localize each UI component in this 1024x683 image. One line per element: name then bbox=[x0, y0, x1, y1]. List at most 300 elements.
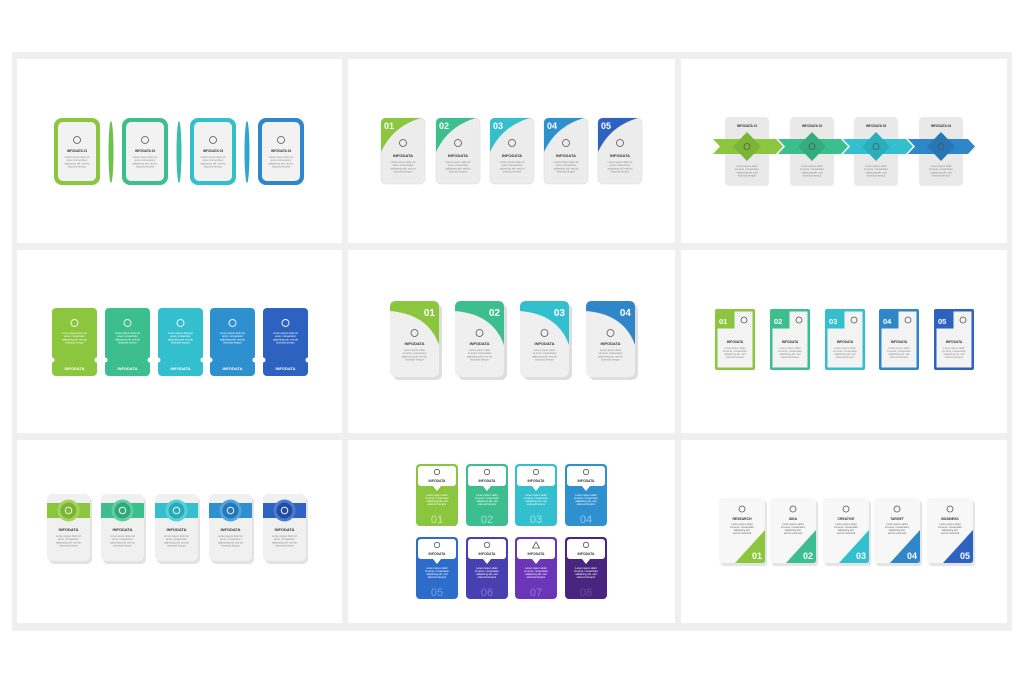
card 2-3: 03 bbox=[493, 121, 503, 131]
card 4-2: Lorem ipsum dolor sit bbox=[115, 332, 140, 335]
gray cards with labels: INFODATA 02 bbox=[802, 124, 822, 128]
card 7-2 bbox=[101, 494, 146, 564]
card 1-1: eiusmod tempor bbox=[68, 165, 86, 169]
card 1-2: adipiscing elit, sed do bbox=[133, 161, 158, 165]
card 7-5: adipiscing elit, sed do bbox=[272, 540, 297, 544]
arrow band bbox=[713, 132, 975, 161]
card 2-2: 02 bbox=[439, 121, 449, 131]
card 4-1: Lorem ipsum dolor sit bbox=[62, 332, 87, 335]
card 6-5: eiusmod tempor bbox=[945, 355, 963, 359]
card 6-1: INFODATA bbox=[727, 340, 744, 344]
card 4-3: Lorem ipsum dolor sit bbox=[168, 332, 193, 335]
card 7-3: amet, consectetur bbox=[166, 537, 187, 541]
card 5-3: eiusmod tempor bbox=[535, 358, 554, 362]
card 6-5: INFODATA bbox=[946, 340, 963, 344]
card 9-5 business: Lorem ipsum dolor bbox=[939, 523, 961, 526]
card 6-2: adipiscing elit, sed bbox=[779, 352, 801, 356]
card 1-4: adipiscing elit, sed do bbox=[269, 161, 294, 165]
panel 8: 8-card grid bbox=[348, 440, 675, 623]
card 2-5: eiusmod tempor bbox=[611, 170, 629, 174]
card 9-2 idea: adipiscing elit, bbox=[785, 528, 801, 532]
card 7-1: amet, consectetur bbox=[58, 537, 79, 541]
gray cards with labels: sit amet, consectetur bbox=[929, 167, 953, 171]
card 1-1 bbox=[54, 118, 100, 185]
card 2-4: amet, consectetur bbox=[556, 163, 576, 167]
card 4-3 bbox=[156, 308, 206, 376]
card 5-4: adipiscing elit, sed do bbox=[598, 354, 623, 358]
card 4-1: amet, consectetur bbox=[64, 334, 85, 338]
card 1-3 bbox=[190, 118, 236, 185]
card 2-4: adipiscing elit, sed do bbox=[554, 166, 579, 170]
card 1-3: Lorem ipsum dolor sit bbox=[201, 156, 225, 159]
card 4-4: eiusmod tempor bbox=[223, 341, 242, 345]
gray cards with labels bbox=[725, 117, 963, 186]
card 6-1: 01 bbox=[719, 317, 727, 326]
card 2-4: eiusmod tempor bbox=[557, 170, 575, 174]
card 8-6: INFODATA bbox=[478, 552, 496, 556]
card 9-3 creative: CREATIVE bbox=[838, 517, 855, 521]
card 2-3: eiusmod tempor bbox=[503, 170, 521, 174]
card 8-6: sit amet, consectetur bbox=[475, 569, 499, 573]
gray cards with labels: Lorem ipsum dolor bbox=[930, 165, 952, 168]
card 4-2: INFODATA bbox=[117, 366, 138, 371]
card 6-4: Lorem ipsum dolor bbox=[888, 347, 910, 350]
card 2-5: Lorem ipsum dolor sit bbox=[608, 161, 632, 164]
card 4-1: eiusmod tempor bbox=[65, 341, 84, 345]
card 8-7: INFODATA bbox=[527, 552, 545, 556]
card 2-1: amet, consectetur bbox=[393, 163, 413, 167]
card 2-1: Lorem ipsum dolor sit bbox=[391, 161, 415, 164]
card 2-3 bbox=[490, 118, 534, 184]
card 1-1: amet, consectetur bbox=[67, 158, 87, 162]
card 9-4 target: sed do eiusmod bbox=[888, 531, 907, 535]
card 2-1: 01 bbox=[384, 121, 394, 131]
card 8-3 bbox=[515, 464, 557, 526]
panel 6: bordered number cards bbox=[681, 250, 1007, 433]
card 8-6 bbox=[466, 537, 508, 599]
card 2-5: adipiscing elit, sed do bbox=[608, 166, 633, 170]
card 8-7 bbox=[515, 537, 557, 599]
card 8-5: 05 bbox=[431, 587, 443, 599]
card 8-2: adipiscing elit, sed bbox=[476, 499, 498, 503]
card 8-6: adipiscing elit, sed bbox=[476, 572, 498, 576]
card 8-4: sit amet, consectetur bbox=[574, 496, 598, 500]
card 5-1: Lorem ipsum dolor bbox=[404, 349, 425, 352]
card 8-3: sit amet, consectetur bbox=[524, 496, 548, 500]
card 8-5: sit amet, consectetur bbox=[425, 569, 449, 573]
card 9-4 target: Lorem ipsum dolor bbox=[886, 523, 908, 526]
card 8-3: INFODATA bbox=[527, 479, 545, 483]
card 5-4: eiusmod tempor bbox=[601, 358, 620, 362]
card 2-2: INFODATA bbox=[448, 153, 468, 158]
card 9-2 idea: IDEA bbox=[789, 517, 798, 521]
card 2-4: INFODATA bbox=[556, 153, 576, 158]
card 2-4: Lorem ipsum dolor sit bbox=[554, 161, 578, 164]
card 7-2: Lorem ipsum dolor sit bbox=[110, 535, 135, 538]
card 6-5: sit amet, consectetur bbox=[942, 349, 966, 353]
card 8-8: Lorem ipsum dolor bbox=[575, 567, 597, 570]
card 5-4: Lorem ipsum dolor bbox=[600, 349, 621, 352]
card 8-3: eiusmod tempor bbox=[527, 502, 545, 506]
card 7-3: adipiscing elit, sed do bbox=[164, 540, 189, 544]
card 8-1: INFODATA bbox=[428, 479, 446, 483]
panel 2: curved number cards bbox=[348, 59, 675, 243]
card 2-2: amet, consectetur bbox=[448, 163, 468, 167]
card 8-8 bbox=[565, 537, 607, 599]
card 9-1 research: sed do eiusmod bbox=[733, 531, 752, 535]
card 2-1: adipiscing elit, sed do bbox=[391, 166, 416, 170]
panel 3: arrow timeline bbox=[681, 59, 1007, 243]
card 6-3: eiusmod tempor bbox=[836, 355, 854, 359]
card 8-2 bbox=[466, 464, 508, 526]
card 8-7: Lorem ipsum dolor bbox=[525, 567, 547, 570]
card 9-2 idea: sed do eiusmod bbox=[784, 531, 803, 535]
card 5-4: INFODATA bbox=[600, 341, 621, 346]
gray cards with labels: eiusmod tempor bbox=[803, 174, 821, 178]
card 8-5: eiusmod tempor bbox=[428, 575, 446, 579]
card 7-4: INFODATA bbox=[220, 527, 241, 532]
card 2-3: Lorem ipsum dolor sit bbox=[500, 161, 524, 164]
card 9-1 research: sit amet, consectetur bbox=[730, 525, 754, 529]
card 9-5 business: sit amet, consectetur bbox=[938, 525, 962, 529]
card 9-5 business bbox=[927, 498, 975, 566]
card 8-8: adipiscing elit, sed bbox=[575, 572, 597, 576]
card 2-5: amet, consectetur bbox=[610, 163, 630, 167]
card 4-5: eiusmod tempor bbox=[276, 341, 295, 345]
card 7-1 bbox=[47, 494, 92, 564]
card 5-2: eiusmod tempor bbox=[470, 358, 489, 362]
card 9-4 target: sit amet, consectetur bbox=[885, 525, 909, 529]
card 6-2: INFODATA bbox=[782, 340, 799, 344]
card 8-4: eiusmod tempor bbox=[577, 502, 595, 506]
card 9-3 creative: Lorem ipsum dolor bbox=[835, 523, 857, 526]
card 8-2: Lorem ipsum dolor bbox=[476, 494, 498, 497]
card 6-5: adipiscing elit, sed bbox=[943, 352, 965, 356]
card 9-4 target bbox=[874, 498, 922, 566]
gray cards with labels: INFODATA 04 bbox=[931, 124, 951, 128]
card 8-2: eiusmod tempor bbox=[478, 502, 496, 506]
card 1-3: INFODATA 03 bbox=[203, 149, 223, 153]
card 7-2: amet, consectetur bbox=[112, 537, 133, 541]
card 6-3: adipiscing elit, sed bbox=[834, 352, 856, 356]
card 7-5: eiusmod tempor bbox=[275, 544, 294, 548]
card 6-3: Lorem ipsum dolor bbox=[834, 347, 856, 350]
card 8-1: Lorem ipsum dolor bbox=[426, 494, 448, 497]
card 4-5: Lorem ipsum dolor sit bbox=[273, 332, 298, 335]
card 8-3: 03 bbox=[530, 514, 542, 526]
card 7-1: Lorem ipsum dolor sit bbox=[56, 535, 81, 538]
card 9-4 target: 04 bbox=[907, 551, 917, 561]
card 8-6: 06 bbox=[481, 587, 493, 599]
card 6-4 bbox=[879, 309, 919, 370]
gray cards with labels: INFODATA 01 bbox=[737, 124, 757, 128]
card 5-1: adipiscing elit, sed do bbox=[402, 354, 427, 358]
card 5-3: 03 bbox=[554, 308, 565, 319]
card 6-1: Lorem ipsum dolor bbox=[724, 347, 746, 350]
card 5-4: 04 bbox=[620, 308, 631, 319]
panel 7: banded circle cards bbox=[17, 440, 342, 623]
card 8-5: adipiscing elit, sed bbox=[426, 572, 448, 576]
card 9-3 creative bbox=[823, 498, 871, 566]
card 2-2: adipiscing elit, sed do bbox=[446, 166, 471, 170]
card 8-4: 04 bbox=[580, 514, 592, 526]
gray cards with labels: eiusmod tempor bbox=[738, 174, 756, 178]
card 7-4: Lorem ipsum dolor sit bbox=[218, 535, 243, 538]
card 4-4: amet, consectetur bbox=[222, 334, 243, 338]
card 9-1 research bbox=[719, 498, 767, 566]
card 2-2 bbox=[436, 118, 480, 184]
card 8-4: Lorem ipsum dolor bbox=[575, 494, 597, 497]
card 2-5: 05 bbox=[601, 121, 611, 131]
card 8-7: 07 bbox=[530, 587, 542, 599]
card 6-1: adipiscing elit, sed bbox=[724, 352, 746, 356]
gray cards with labels: INFODATA 03 bbox=[866, 124, 886, 128]
card 2-1: eiusmod tempor bbox=[394, 170, 412, 174]
card 5-3: Lorem ipsum dolor bbox=[534, 349, 555, 352]
card 4-1: INFODATA bbox=[64, 366, 85, 371]
card 9-1 research: adipiscing elit, bbox=[734, 528, 750, 532]
card 6-3 bbox=[825, 309, 865, 370]
gray cards with labels: eiusmod tempor bbox=[867, 174, 885, 178]
card 6-4: adipiscing elit, sed bbox=[888, 352, 910, 356]
card 1-2: eiusmod tempor bbox=[136, 165, 154, 169]
card 5-1: INFODATA bbox=[404, 341, 425, 346]
card 8-5: Lorem ipsum dolor bbox=[426, 567, 448, 570]
card 6-4: 04 bbox=[883, 317, 892, 326]
card 7-2: adipiscing elit, sed do bbox=[110, 540, 135, 544]
card 8-4: INFODATA bbox=[577, 479, 595, 483]
card 4-5: INFODATA bbox=[275, 366, 296, 371]
card 5-4 bbox=[586, 301, 638, 380]
card 6-2: 02 bbox=[774, 317, 782, 326]
card 7-5 bbox=[263, 494, 308, 564]
card 8-4: adipiscing elit, sed bbox=[575, 499, 597, 503]
card 6-3: 03 bbox=[829, 317, 837, 326]
lens separators bbox=[108, 121, 250, 183]
card 5-3: adipiscing elit, sed do bbox=[532, 354, 557, 358]
card 4-3: amet, consectetur bbox=[170, 334, 191, 338]
card 8-1: adipiscing elit, sed bbox=[426, 499, 448, 503]
card 8-7: sit amet, consectetur bbox=[524, 569, 548, 573]
card 8-6: eiusmod tempor bbox=[478, 575, 496, 579]
card 9-1 research: RESEARCH bbox=[732, 517, 752, 521]
card 7-3: Lorem ipsum dolor sit bbox=[164, 535, 189, 538]
card 5-2 bbox=[455, 301, 507, 380]
card 9-1 research: Lorem ipsum dolor bbox=[731, 523, 753, 526]
card 8-3: Lorem ipsum dolor bbox=[525, 494, 547, 497]
card 7-5: amet, consectetur bbox=[274, 537, 295, 541]
card 7-3: eiusmod tempor bbox=[167, 544, 186, 548]
card 8-7: eiusmod tempor bbox=[527, 575, 545, 579]
card 8-1 bbox=[416, 464, 458, 526]
card 7-4: adipiscing elit, sed do bbox=[218, 540, 243, 544]
card 5-3: sit amet, consectetur bbox=[533, 351, 557, 355]
card 4-3: INFODATA bbox=[170, 366, 191, 371]
card 9-3 creative: sed do eiusmod bbox=[837, 531, 856, 535]
card 8-2: 02 bbox=[481, 514, 493, 526]
card 7-1: adipiscing elit, sed do bbox=[56, 540, 81, 544]
card 8-2: INFODATA bbox=[478, 479, 496, 483]
card 5-3: INFODATA bbox=[534, 341, 555, 346]
card 9-2 idea: Lorem ipsum dolor bbox=[782, 523, 804, 526]
card 9-5 business: BUSINESS bbox=[941, 517, 959, 521]
card 7-2: eiusmod tempor bbox=[113, 544, 132, 548]
card 6-3: INFODATA bbox=[837, 340, 854, 344]
card 9-3 creative: 03 bbox=[856, 551, 866, 561]
card 8-5: INFODATA bbox=[428, 552, 446, 556]
card 4-5: amet, consectetur bbox=[275, 334, 296, 338]
gray cards with labels: Lorem ipsum dolor bbox=[865, 165, 887, 168]
gray cards with labels: adipiscing elit, sed bbox=[865, 170, 887, 174]
card 7-1: INFODATA bbox=[58, 527, 79, 532]
card 5-2: INFODATA bbox=[469, 341, 490, 346]
card 8-3: adipiscing elit, sed bbox=[525, 499, 547, 503]
card 9-1 research: 01 bbox=[752, 551, 762, 561]
card 1-4 bbox=[258, 118, 304, 185]
card 8-1: eiusmod tempor bbox=[428, 502, 446, 506]
gray cards with labels: Lorem ipsum dolor bbox=[801, 165, 823, 168]
card 2-5 bbox=[598, 118, 642, 184]
panel 4: ticket cards bbox=[17, 250, 342, 433]
card 6-4: eiusmod tempor bbox=[890, 355, 908, 359]
card 4-3: adipiscing elit, sed do bbox=[168, 337, 193, 341]
card 8-7: adipiscing elit, sed bbox=[525, 572, 547, 576]
card 8-8: sit amet, consectetur bbox=[574, 569, 598, 573]
card 7-2: INFODATA bbox=[112, 527, 133, 532]
gray cards with labels: adipiscing elit, sed bbox=[801, 170, 823, 174]
card 4-2: eiusmod tempor bbox=[118, 341, 137, 345]
card 5-2: sit amet, consectetur bbox=[468, 351, 492, 355]
card 5-3 bbox=[520, 301, 572, 380]
card 6-5 bbox=[934, 309, 974, 370]
card 1-3: eiusmod tempor bbox=[204, 165, 222, 169]
card 4-4 bbox=[208, 308, 258, 376]
gray cards with labels: adipiscing elit, sed bbox=[930, 170, 952, 174]
card 4-1 bbox=[50, 308, 100, 376]
card 6-2 bbox=[770, 309, 810, 370]
card 9-2 idea: 02 bbox=[803, 551, 813, 561]
card 8-4 bbox=[565, 464, 607, 526]
card 8-5 bbox=[416, 537, 458, 599]
card 2-3: amet, consectetur bbox=[502, 163, 522, 167]
card 4-2 bbox=[102, 308, 152, 376]
gray cards with labels: sit amet, consectetur bbox=[864, 167, 888, 171]
card 6-4: INFODATA bbox=[891, 340, 908, 344]
card 9-3 creative: sit amet, consectetur bbox=[834, 525, 858, 529]
gray cards with labels: eiusmod tempor bbox=[932, 174, 950, 178]
card 7-4 bbox=[209, 494, 254, 564]
card 9-4 target: TARGET bbox=[890, 517, 905, 521]
card 4-4: Lorem ipsum dolor sit bbox=[220, 332, 245, 335]
card 7-4: eiusmod tempor bbox=[221, 544, 240, 548]
card 9-4 target: adipiscing elit, bbox=[889, 528, 905, 532]
card 6-2: Lorem ipsum dolor bbox=[779, 347, 801, 350]
card 6-1 bbox=[715, 309, 755, 370]
card 4-4: adipiscing elit, sed do bbox=[220, 337, 245, 341]
card 4-5 bbox=[260, 308, 310, 376]
card 7-5: Lorem ipsum dolor sit bbox=[272, 535, 297, 538]
card 1-1: adipiscing elit, sed do bbox=[65, 161, 90, 165]
card 1-4: eiusmod tempor bbox=[272, 165, 290, 169]
card 2-1: INFODATA bbox=[393, 153, 413, 158]
card 7-3: INFODATA bbox=[166, 527, 187, 532]
card 6-5: 05 bbox=[938, 317, 946, 326]
card 1-2: INFODATA 02 bbox=[135, 149, 155, 153]
card 2-4: 04 bbox=[547, 121, 557, 131]
card 9-5 business: adipiscing elit, bbox=[942, 528, 958, 532]
card 5-1: eiusmod tempor bbox=[405, 358, 424, 362]
card 2-3: INFODATA bbox=[502, 153, 522, 158]
card 6-3: sit amet, consectetur bbox=[833, 349, 857, 353]
card 1-4: amet, consectetur bbox=[271, 158, 291, 162]
card 9-5 business: sed do eiusmod bbox=[941, 531, 960, 535]
card 5-1 bbox=[390, 301, 442, 380]
card 6-1: eiusmod tempor bbox=[726, 355, 744, 359]
panel 5: curved top cards bbox=[348, 250, 675, 433]
card 2-3: adipiscing elit, sed do bbox=[500, 166, 525, 170]
card 5-2: Lorem ipsum dolor bbox=[469, 349, 490, 352]
card 8-1: sit amet, consectetur bbox=[425, 496, 449, 500]
card 2-2: Lorem ipsum dolor sit bbox=[446, 161, 470, 164]
card 9-2 idea: sit amet, consectetur bbox=[781, 525, 805, 529]
card 7-1: eiusmod tempor bbox=[59, 544, 78, 548]
panel 1: wavy frames bbox=[17, 59, 342, 243]
card 1-1: INFODATA 01 bbox=[67, 149, 87, 153]
card 5-2: 02 bbox=[489, 308, 500, 319]
card 8-8: INFODATA bbox=[577, 552, 595, 556]
card 4-4: INFODATA bbox=[222, 366, 243, 371]
card 9-2 idea bbox=[770, 498, 818, 566]
card 7-3 bbox=[155, 494, 200, 564]
card 5-4: sit amet, consectetur bbox=[599, 351, 623, 355]
card 2-1 bbox=[381, 118, 425, 184]
card 6-5: Lorem ipsum dolor bbox=[943, 347, 965, 350]
gray cards with labels: adipiscing elit, sed bbox=[736, 170, 758, 174]
gray cards with labels: sit amet, consectetur bbox=[800, 167, 824, 171]
card 4-2: amet, consectetur bbox=[117, 334, 138, 338]
card 9-5 business: 05 bbox=[960, 551, 970, 561]
card 1-2: Lorem ipsum dolor sit bbox=[133, 156, 157, 159]
card 7-4: amet, consectetur bbox=[220, 537, 241, 541]
card 2-5: INFODATA bbox=[610, 153, 630, 158]
card 6-2: sit amet, consectetur bbox=[778, 349, 802, 353]
card 8-2: sit amet, consectetur bbox=[475, 496, 499, 500]
card 4-1: adipiscing elit, sed do bbox=[62, 337, 87, 341]
card 4-2: adipiscing elit, sed do bbox=[115, 337, 140, 341]
card 6-2: eiusmod tempor bbox=[781, 355, 799, 359]
card 8-8: eiusmod tempor bbox=[577, 575, 595, 579]
card 5-2: adipiscing elit, sed do bbox=[467, 354, 492, 358]
card 1-4: INFODATA 04 bbox=[271, 149, 291, 153]
panel 9: corner triangle cards bbox=[681, 440, 1007, 623]
card 9-3 creative: adipiscing elit, bbox=[838, 528, 854, 532]
card 1-2: amet, consectetur bbox=[135, 158, 155, 162]
card 7-5: INFODATA bbox=[274, 527, 295, 532]
card 6-4: sit amet, consectetur bbox=[887, 349, 911, 353]
card 1-4: Lorem ipsum dolor sit bbox=[269, 156, 293, 159]
card 4-3: eiusmod tempor bbox=[171, 341, 190, 345]
card 4-5: adipiscing elit, sed do bbox=[273, 337, 298, 341]
gray cards with labels: Lorem ipsum dolor bbox=[736, 165, 758, 168]
card 1-3: amet, consectetur bbox=[203, 158, 223, 162]
card 1-3: adipiscing elit, sed do bbox=[201, 161, 226, 165]
card 8-8: 08 bbox=[580, 587, 592, 599]
card 5-1: sit amet, consectetur bbox=[403, 351, 427, 355]
card 6-1: sit amet, consectetur bbox=[723, 349, 747, 353]
card 8-1: 01 bbox=[431, 514, 443, 526]
gray cards with labels: sit amet, consectetur bbox=[735, 167, 759, 171]
card 8-6: Lorem ipsum dolor bbox=[476, 567, 498, 570]
